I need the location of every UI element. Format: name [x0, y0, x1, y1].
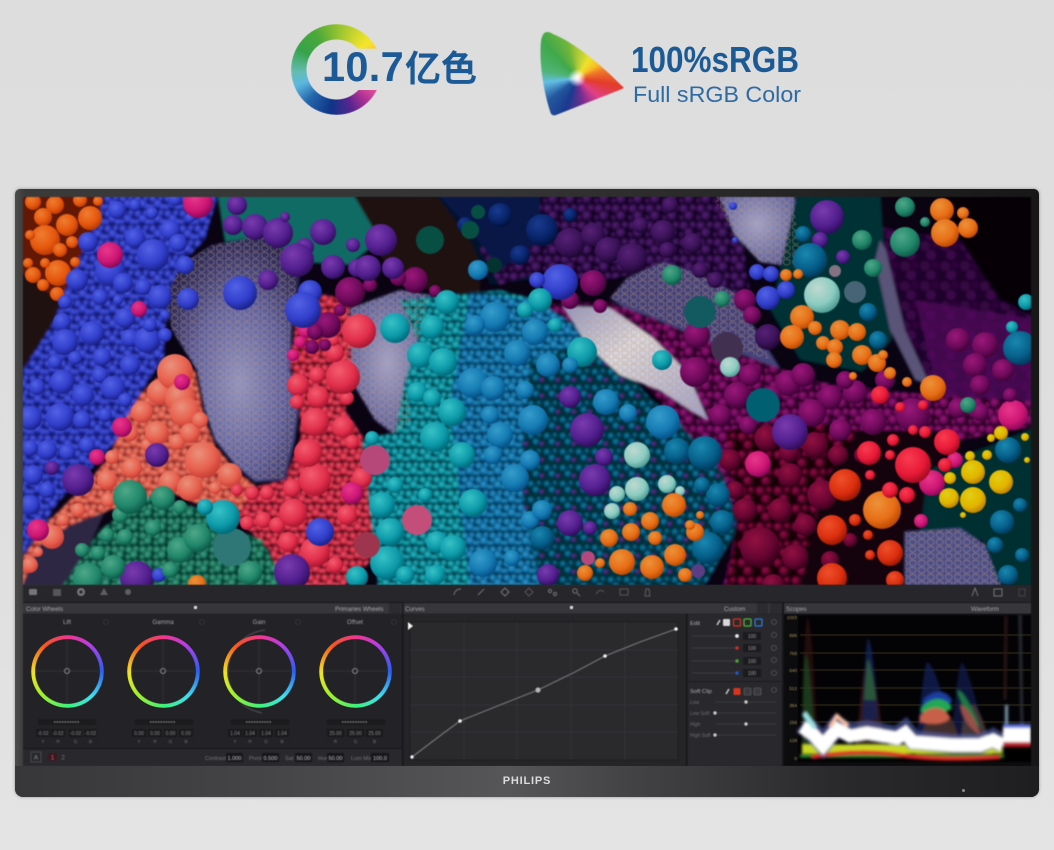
spheres: blue cluster	[18, 192, 195, 515]
channel letters: R	[56, 739, 60, 744]
bottom controls row: 0.500	[264, 756, 278, 762]
panel: edit and soft clip controls: 100	[748, 646, 756, 652]
chart: waveform scope: 384	[789, 703, 797, 708]
waveform traces	[800, 615, 1031, 760]
spheres: coral cluster	[22, 354, 242, 573]
chart: waveform scope: 1023	[787, 615, 797, 620]
panel: edit and soft clip controls: High Soft	[690, 733, 711, 739]
panel: edit and soft clip controls: Soft Clip	[690, 689, 712, 695]
spheres: magenta accents	[27, 188, 1028, 541]
wheel centre hubs	[64, 668, 358, 674]
text: Full sRGB Color: Full sRGB Color	[633, 82, 801, 107]
icon: colour wheel lift	[30, 634, 104, 708]
numeric value boxes	[36, 729, 383, 737]
channel letters: Y	[137, 739, 141, 744]
bottom controls row	[23, 748, 402, 766]
wheel values: 0.00	[181, 731, 191, 737]
spheres: teal green	[73, 197, 976, 593]
bottom controls row: 2	[61, 756, 65, 762]
wheel labels: Gain	[253, 620, 265, 626]
panel headers: Primaries Wheels	[335, 606, 383, 613]
spheres: teal and cyan	[197, 288, 1034, 588]
spheres: bright orange clusters	[188, 198, 978, 593]
spheres: red cluster	[231, 314, 376, 573]
panel headers: Color Wheels	[26, 606, 63, 613]
chart: waveform scope: 128	[789, 738, 797, 743]
toolbar icons left	[29, 588, 131, 596]
bottom controls row: Lum Mix	[351, 756, 372, 762]
wheel labels: Gamma	[152, 620, 174, 626]
wheel values: 0.00	[134, 731, 144, 737]
panel: edit and soft clip controls: 100	[748, 634, 756, 640]
toolbar icons centre	[454, 588, 650, 596]
monitor chin	[15, 766, 1039, 797]
sphere: large wine ball	[740, 527, 780, 567]
spheres: vivid red group	[857, 386, 960, 503]
panel headers: Custom	[724, 606, 745, 613]
heading: 10.7亿色: 10.7亿色	[322, 40, 477, 92]
channel letters: G	[264, 739, 268, 744]
panel: edit and soft clip controls: 100	[748, 659, 756, 665]
bottom controls row: 100.0	[373, 756, 387, 762]
wheel labels	[63, 620, 363, 626]
panel: software toolbar and colour grading interface	[22, 584, 1032, 766]
bottom controls row: Contrast	[205, 756, 227, 762]
bottom controls row: Hue	[318, 756, 328, 762]
wheel values: 1.04	[230, 731, 240, 737]
soft pattern regions of small spheres	[10, 180, 1040, 590]
wheel values: 1.04	[245, 731, 255, 737]
spheres: sky blue group	[458, 260, 680, 577]
gain outer arc	[228, 630, 265, 713]
icon: colour wheel gamma	[126, 634, 200, 708]
wheel values: 1.04	[277, 731, 287, 737]
panel: edit and soft clip controls: Low	[690, 700, 700, 706]
monitor frame	[15, 189, 1039, 797]
chart: waveform scope: 896	[789, 633, 797, 638]
wheel values: -0.02	[37, 731, 49, 737]
icon: colour wheel offset	[318, 634, 392, 708]
chart: curves editor	[404, 614, 686, 766]
icon: colour wheel gain	[222, 634, 296, 708]
power indicator	[962, 789, 965, 792]
panel headers: Scopes	[786, 606, 807, 613]
bottom controls row: 1	[51, 756, 55, 762]
wheel values	[37, 731, 381, 737]
wheel crosshairs and hubs	[35, 620, 396, 703]
panel headers	[23, 603, 1031, 614]
shell surface texture	[165, 197, 1002, 585]
spheres: navy balls	[457, 203, 577, 265]
sphere: half hidden yellow ball	[747, 529, 767, 549]
bottom controls row: 1.000	[228, 756, 242, 762]
spheres: dusky pink balls	[354, 265, 866, 578]
artwork background	[23, 197, 1031, 585]
wheel values: 25.00	[368, 731, 381, 737]
wheel values: 0.00	[166, 731, 176, 737]
spheres: yellow cluster	[939, 426, 1030, 518]
artwork: coloured spheres on monitor screen	[22, 196, 1032, 586]
wheel values: 25.00	[329, 731, 342, 737]
heading: 100% sRGB	[631, 39, 801, 107]
wheel labels: Offset	[347, 620, 363, 626]
spheres: strong blue balls	[152, 202, 795, 582]
spheres: dark purple dome at top	[555, 197, 781, 350]
wheel values: 25.00	[349, 731, 362, 737]
channel letters: R	[248, 739, 252, 744]
panel: edit and soft clip controls: Edit	[690, 621, 700, 627]
spheres: dark maroon group	[305, 267, 1017, 441]
icon: 10.7 billion colour ring	[291, 24, 382, 115]
bottom controls row: A	[34, 756, 38, 762]
channel letters: G	[354, 739, 358, 744]
channel letters: G	[169, 739, 173, 744]
wheel values: -0.02	[52, 731, 64, 737]
chart: waveform scope: 768	[789, 651, 797, 656]
chart: waveform scope	[784, 614, 1031, 766]
channel letters: Y	[41, 739, 45, 744]
channel letters: B	[280, 739, 284, 744]
spheres: deep red-wine balls	[719, 425, 870, 596]
bottom controls row: 50.00	[328, 756, 342, 762]
channel letters: Y	[233, 739, 237, 744]
spheres: pale mint balls	[604, 277, 840, 519]
toolbar icons right	[972, 588, 1025, 596]
panel headers: Curves	[405, 606, 425, 613]
channel letters: B	[89, 739, 92, 744]
wheel values: 0.00	[150, 731, 160, 737]
sliders under wheels	[38, 719, 385, 725]
channel letters: R	[334, 739, 338, 744]
panel: edit and soft clip controls	[688, 614, 782, 766]
icon: sRGB colour gamut triangle	[540, 31, 624, 116]
spheres: orange cluster	[23, 193, 103, 301]
panel headers: Waveform	[971, 606, 999, 613]
channel letters: G	[74, 739, 78, 744]
channel letters: B	[184, 739, 188, 744]
channel letters	[41, 739, 376, 744]
chart: waveform scope: 640	[789, 668, 797, 673]
chart: waveform scope: 256	[789, 720, 797, 725]
wheel labels: Lift	[63, 620, 71, 626]
bottom controls row: 50.00	[296, 756, 310, 762]
wheel values: -0.02	[85, 731, 96, 737]
spheres: deep teal group	[530, 226, 1037, 585]
spheres: purple group	[45, 195, 850, 595]
bottom controls row: Pivot	[249, 756, 262, 762]
panel: edit and soft clip controls: Low Soft	[690, 711, 710, 717]
wheel values: -0.02	[70, 731, 81, 737]
channel letters: R	[153, 739, 157, 744]
channel letters: B	[373, 739, 376, 744]
logo: PHILIPS: PHILIPS	[503, 775, 551, 787]
panel: edit and soft clip controls: 100	[748, 671, 756, 677]
wheel values: 1.04	[261, 731, 271, 737]
chart: waveform scope: 0	[794, 756, 797, 761]
chart: waveform scope: 512	[789, 686, 797, 691]
spheres: red-orange group	[817, 469, 904, 593]
bottom controls row: Sat	[285, 756, 294, 762]
dividers	[23, 602, 1031, 766]
panel: edit and soft clip controls: High	[690, 722, 701, 728]
